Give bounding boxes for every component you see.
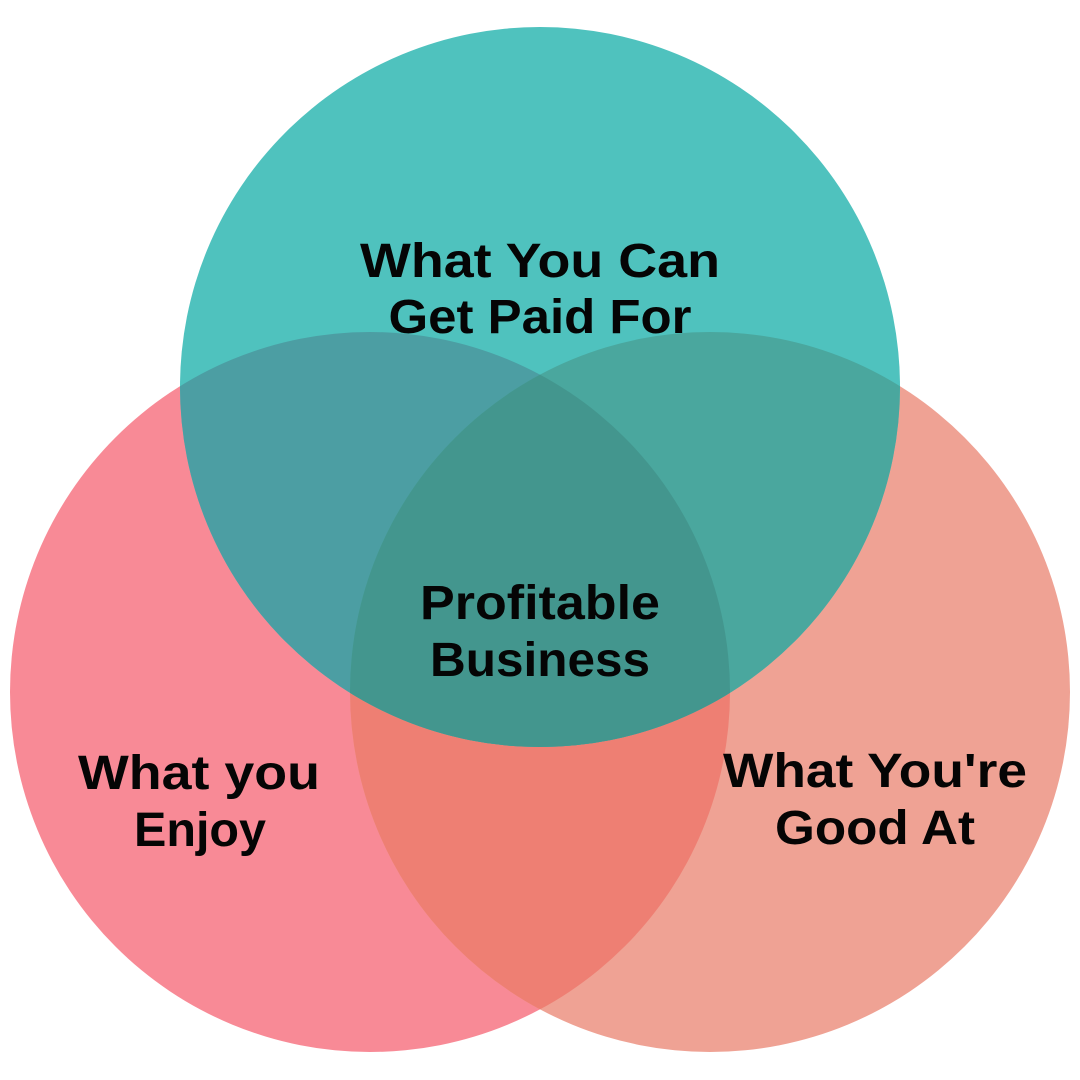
circle: what you're good at xyxy=(350,332,1070,1052)
label: what you're good at: Good At xyxy=(775,802,975,855)
overlap: enjoy and paid for xyxy=(180,332,730,747)
label: what you can get paid for: What You Can xyxy=(360,235,720,288)
label: profitable business: Profitable xyxy=(420,577,660,630)
label: profitable business: Business xyxy=(430,634,650,687)
overlap: enjoy and good at xyxy=(350,693,730,1010)
label: what you can get paid for: Get Paid For xyxy=(388,291,692,344)
circle: what you enjoy xyxy=(10,332,730,1052)
label: what you can get paid for xyxy=(360,235,720,344)
overlap: good at and paid for xyxy=(350,332,900,747)
label: profitable business xyxy=(420,577,660,687)
label: what you're good at: What You're xyxy=(723,745,1027,798)
label: what you're good at xyxy=(723,745,1027,855)
circle: what you can get paid for xyxy=(180,27,900,747)
overlap: center profitable business xyxy=(350,375,730,747)
label: what you enjoy: What you xyxy=(78,747,320,800)
label: what you enjoy: Enjoy xyxy=(134,804,266,857)
label: what you enjoy xyxy=(78,747,320,857)
